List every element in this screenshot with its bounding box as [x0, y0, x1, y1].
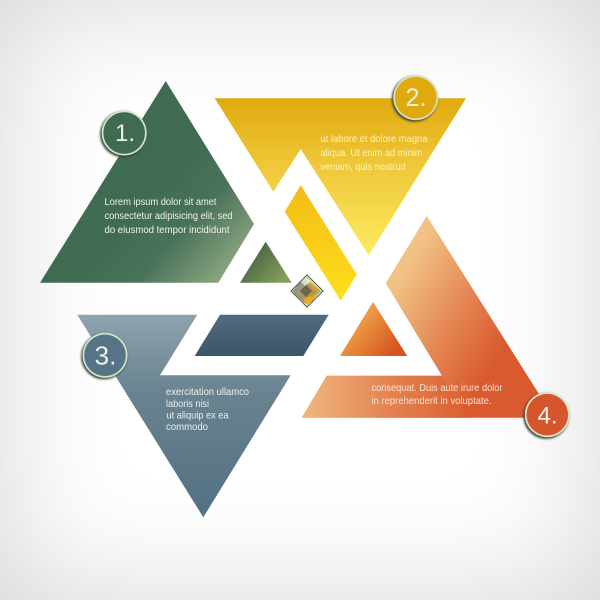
badge 2: 2. [406, 84, 426, 112]
badge 2 [392, 75, 438, 122]
text block 1: Lorem ipsum dolor sit amet [104, 197, 217, 208]
yellow parallelogram [285, 185, 357, 301]
badge 4 [523, 392, 570, 439]
panel 1: green triangle [40, 81, 292, 283]
badge 4: 4. [537, 402, 558, 430]
text block 2 [320, 134, 428, 173]
orange main shape [302, 216, 554, 418]
text block 1 [104, 197, 233, 236]
text block 4 [372, 383, 503, 407]
small green triangle [240, 242, 292, 283]
text block 3: ut aliquip ex ea [166, 410, 229, 422]
green main shape [40, 81, 254, 283]
text block 3 [166, 387, 249, 433]
orange lower band blend [302, 376, 468, 418]
text block 3: exercitation ullamco [166, 387, 249, 398]
blue parallelogram [195, 315, 329, 356]
badge 3 [81, 333, 128, 379]
badge 3: 3. [95, 340, 116, 370]
yellow main shape [215, 98, 466, 255]
small orange triangle [340, 302, 407, 356]
badge 1: 1. [115, 120, 135, 147]
blue main shape [77, 315, 291, 517]
text block 1: do eiusmod tempor incididunt [104, 225, 230, 236]
text block 3: laboris nisi [166, 399, 209, 410]
text block 3: commodo [166, 422, 208, 433]
icon: center diamond [291, 275, 323, 307]
badge 1 [100, 110, 147, 157]
panel 2: yellow triangle [215, 98, 466, 301]
panel 3: blue triangle [77, 315, 329, 517]
text block 4: consequat. Duis aute irure dolor [372, 383, 503, 394]
text block 2: ut labore et dolore magna [320, 134, 428, 145]
panel 4: orange triangle [302, 216, 554, 418]
text block 2: veniam, quis nostrud [320, 162, 406, 173]
text block 2: aliqua. Ut enim ad minim [320, 148, 422, 159]
text block 1: consectetur adipisicing elit, sed [104, 211, 233, 222]
text block 4: in reprehenderit in voluptate. [372, 396, 492, 407]
